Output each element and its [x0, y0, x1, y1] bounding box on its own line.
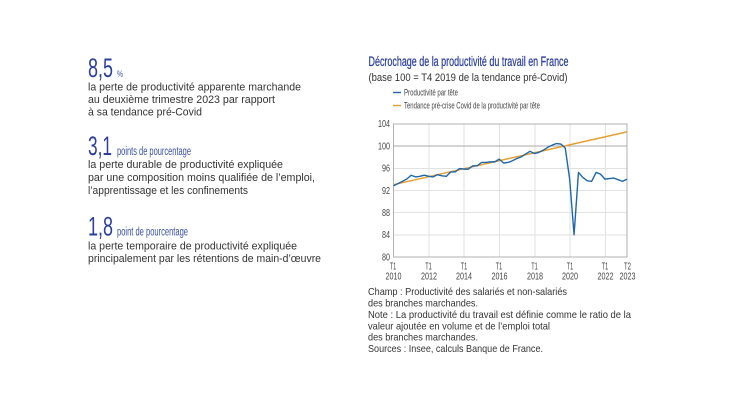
notes and sources: des branches marchandes. [368, 298, 478, 310]
notes and sources: valeur ajoutée en volume et de l’emploi total [368, 320, 550, 332]
chart title: Décrochage de la productivité du travail en France [368, 54, 568, 69]
key figure: 1,8 point de pourcentage: principalement par les rétentions de main-d’œuvre [88, 253, 321, 265]
series: trend [394, 132, 627, 185]
x axis labels: T1 [390, 260, 396, 272]
y axis labels: 104 [378, 118, 390, 130]
x axis labels: 2023 [620, 270, 636, 282]
chart subtitle: (base 100 = T4 2019 de la tendance pré-Covid) [368, 72, 568, 84]
series: productivity [394, 144, 627, 235]
notes and sources: Champ : Productivité des salariés et non-salariés [368, 286, 567, 298]
panel: key figures [88, 53, 321, 265]
x axis labels: T1 [496, 260, 502, 272]
notes and sources [368, 286, 631, 355]
notes and sources: Note : La productivité du travail est définie comme le ratio de la [368, 309, 631, 321]
y axis labels: 84 [382, 229, 390, 241]
x axis labels: T1 [602, 260, 608, 272]
y axis labels [378, 118, 390, 264]
y axis labels: 96 [382, 162, 390, 174]
key figure: 8,5 %: la perte de productivité apparente marchande [88, 81, 301, 93]
x axis labels: T1 [461, 260, 467, 272]
x axis labels: T1 [567, 260, 573, 272]
x axis labels: 2018 [527, 270, 543, 282]
x axis labels: 2010 [386, 270, 402, 282]
y axis labels: 100 [378, 140, 390, 152]
x axis labels: T2 [624, 260, 631, 272]
legend: Tendance pré-crise Covid de la productivité par tête [404, 100, 540, 112]
y axis labels: 88 [382, 207, 390, 219]
key figure: 3,1 points de pourcentage: 3,1 [88, 131, 112, 161]
x axis labels: T1 [531, 260, 538, 272]
key figure: 3,1 points de pourcentage: la perte durable de productivité expliquée [88, 159, 283, 171]
key figure: 8,5 %: à sa tendance pré-Covid [88, 106, 202, 118]
key figure: 3,1 points de pourcentage: points de pourcentage [117, 146, 191, 158]
key figure: 1,8 point de pourcentage: point de pourcentage [117, 226, 188, 238]
key figure: 3,1 points de pourcentage: par une composition moins qualifiée de l’emploi, [88, 172, 315, 184]
legend [393, 88, 540, 112]
key figure: 1,8 point de pourcentage: la perte temporaire de productivité expliquée [88, 240, 297, 252]
x axis labels: 2016 [492, 270, 508, 282]
key figure: 8,5 %: au deuxième trimestre 2023 par rapport [88, 94, 275, 106]
key figure: 1,8 point de pourcentage [88, 212, 321, 265]
key figure: 8,5 %: 8,5 [88, 53, 113, 83]
x axis labels: 2012 [421, 270, 437, 282]
key figure: 8,5 % [88, 53, 301, 118]
y axis labels: 80 [382, 252, 390, 264]
key figure: 3,1 points de pourcentage: l’apprentissage et les confinements [88, 185, 248, 197]
y axis labels: 92 [382, 185, 390, 197]
x axis labels: 2022 [598, 270, 614, 282]
x axis labels [386, 260, 636, 282]
key figure: 3,1 points de pourcentage [88, 131, 315, 197]
x axis labels: 2014 [456, 270, 472, 282]
x axis labels: T1 [425, 260, 432, 272]
notes and sources: Sources : Insee, calculs Banque de France. [368, 343, 543, 355]
legend: Productivité par tête [404, 88, 458, 98]
key figure: 8,5 %: % [117, 69, 123, 79]
line chart [378, 118, 636, 282]
key figure: 1,8 point de pourcentage: 1,8 [88, 212, 113, 242]
x axis labels: 2020 [562, 270, 578, 282]
notes and sources: des branches marchandes. [368, 332, 478, 344]
